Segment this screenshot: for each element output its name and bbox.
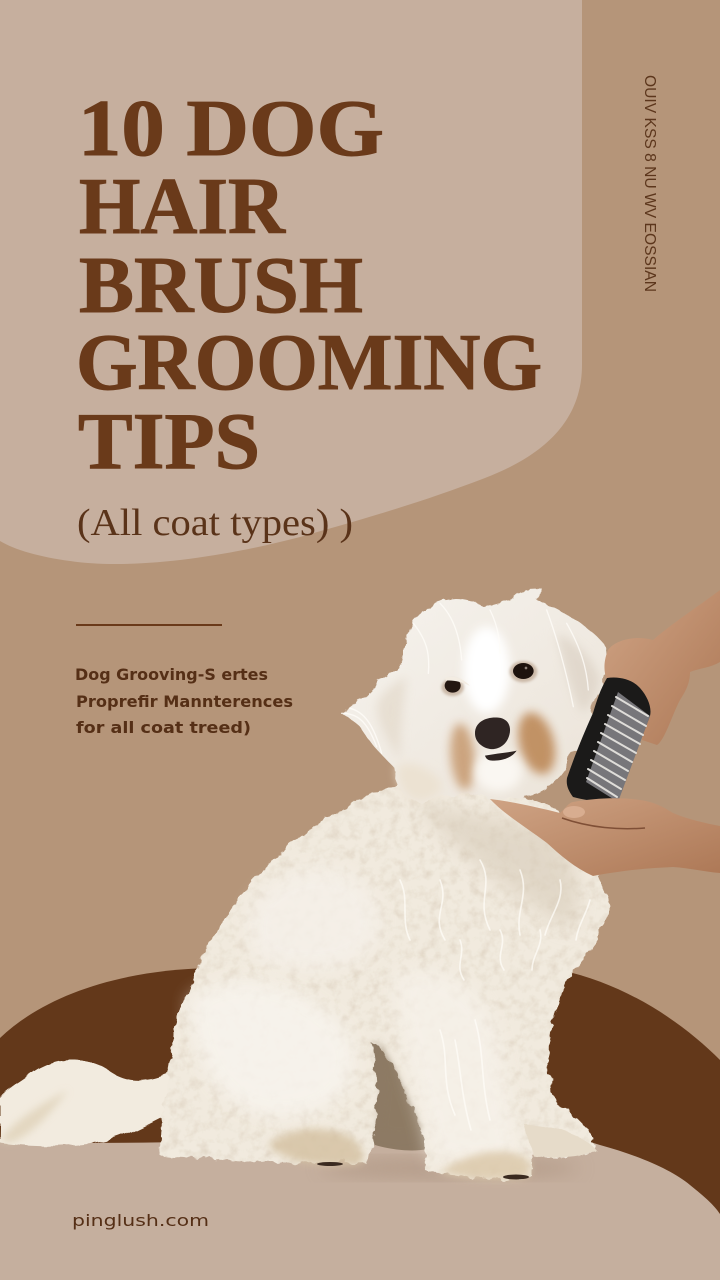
ear shadow right — [557, 633, 600, 713]
paw pad — [317, 1162, 343, 1166]
upper hand and arm — [604, 590, 720, 745]
thumb crease — [562, 818, 645, 829]
rear shadow between legs — [360, 1020, 440, 1150]
front paw curls — [440, 1151, 531, 1180]
body shadow between legs — [376, 1040, 420, 1137]
front leg highlight — [395, 971, 520, 1166]
subtitle: (All coat types) ) — [77, 502, 353, 544]
title line 4: GROOMING — [76, 319, 542, 407]
dog head — [342, 589, 607, 803]
ear base curls — [397, 763, 442, 802]
muzzle — [475, 752, 522, 792]
tan patch left — [448, 722, 478, 791]
dog body — [160, 784, 610, 1178]
dog illustration — [0, 589, 720, 1180]
description line 2: Proprefir Mannterences — [76, 692, 293, 711]
panel: light floor — [0, 1131, 720, 1280]
brush bristles — [586, 692, 650, 802]
upper body highlight — [248, 868, 380, 970]
neck shading — [415, 800, 578, 930]
divider line — [76, 624, 222, 626]
panel: title backdrop — [0, 0, 582, 564]
brush back — [567, 677, 651, 802]
tan patch right — [512, 708, 562, 778]
dog mouth — [485, 751, 517, 761]
forehead highlight — [463, 627, 510, 713]
haunch highlight — [190, 981, 354, 1117]
bristle lines — [587, 697, 648, 797]
head hair strands — [342, 603, 588, 753]
grooming brush — [567, 677, 651, 802]
vertical side text: OUIV KSS 8 NU WV EOSSIAN — [641, 75, 658, 292]
panel: dark brown hump — [0, 968, 720, 1280]
dog nose — [475, 718, 510, 749]
description line 1: Dog Grooving-S ertes — [75, 665, 268, 684]
right eye — [509, 661, 537, 682]
title line 5: TIPS — [78, 398, 260, 486]
head shape — [342, 589, 607, 803]
dog floor shadow — [320, 1159, 580, 1177]
description text — [75, 665, 293, 737]
tail shading — [0, 1090, 68, 1143]
fur strands — [400, 860, 590, 1130]
thumbnail — [563, 806, 585, 818]
ear shadow left — [377, 677, 407, 760]
title — [76, 85, 542, 486]
paw pad — [503, 1174, 529, 1180]
rear paw curls — [268, 1129, 364, 1166]
dog tail — [0, 1060, 172, 1146]
title line 2: HAIR — [79, 163, 286, 251]
website: pinglush.com — [72, 1211, 209, 1230]
lower hand and arm — [490, 798, 720, 876]
title line 3: BRUSH — [79, 242, 363, 330]
far paw — [525, 1125, 596, 1157]
left eye — [441, 677, 470, 696]
description line 3: for all coat treed) — [76, 718, 251, 737]
title line 1: 10 DOG — [78, 85, 384, 173]
